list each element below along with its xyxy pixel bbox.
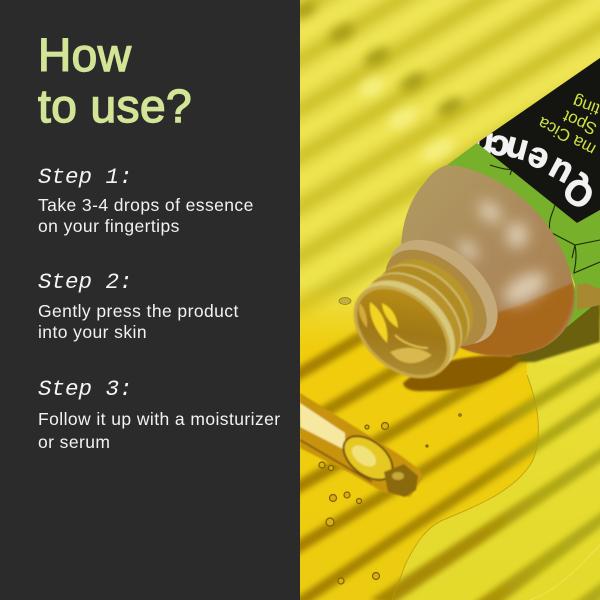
bottle tube green label bbox=[447, 143, 600, 327]
bottle neck threads bbox=[362, 259, 474, 369]
bottle label black panel bbox=[477, 58, 600, 223]
background surface bbox=[300, 0, 600, 600]
bottle shadow bbox=[510, 300, 600, 362]
label crackle lines bbox=[490, 160, 600, 273]
droplet near opening bbox=[339, 298, 351, 304]
step 3 text: Follow it up with a moisturizer bbox=[38, 409, 281, 429]
label ornament bbox=[577, 284, 600, 310]
dropper bulb bbox=[342, 434, 394, 482]
step 1 heading: Step 1: bbox=[38, 164, 133, 190]
title: to use? bbox=[38, 80, 192, 132]
upper dark blobs and highlights bbox=[292, 0, 466, 166]
oil droplets bbox=[319, 414, 461, 584]
product line 2: Spot bbox=[560, 106, 600, 139]
step 3 text bbox=[38, 409, 281, 452]
step 1 text bbox=[38, 195, 254, 236]
amber liquid bbox=[455, 283, 574, 356]
lower sharp shadow stripes bbox=[300, 305, 600, 600]
step 3 text: or serum bbox=[38, 432, 110, 452]
bottle opening bbox=[353, 285, 451, 380]
photo: oil bottle on yellow surface bbox=[300, 0, 600, 600]
oil puddle bbox=[300, 285, 538, 600]
product name: ma Cica bbox=[534, 113, 599, 159]
neck shadow bbox=[403, 356, 522, 391]
step 2 text: into your skin bbox=[38, 322, 147, 342]
step 1 text: Take 3-4 drops of essence bbox=[38, 195, 254, 215]
dropper pipette bbox=[300, 393, 423, 497]
title: How bbox=[38, 29, 131, 81]
opening reflections bbox=[359, 302, 432, 363]
oil puddle outline bbox=[392, 375, 538, 600]
panel: instructions bbox=[0, 0, 300, 600]
title bbox=[38, 29, 192, 132]
step 3 heading: Step 3: bbox=[38, 376, 133, 402]
upper soft shadow stripes bbox=[290, 0, 600, 321]
step 2 text bbox=[38, 301, 239, 342]
bottle collar bbox=[390, 240, 498, 344]
step 2 text: Gently press the product bbox=[38, 301, 239, 321]
label text bbox=[477, 94, 600, 207]
brand name: Quench bbox=[469, 123, 600, 218]
dropper tip bbox=[384, 464, 418, 497]
step 1 text: on your fingertips bbox=[38, 216, 180, 236]
amber bottle shoulder bbox=[401, 165, 575, 356]
step 2 heading: Step 2: bbox=[38, 269, 133, 295]
shoulder highlights bbox=[455, 197, 552, 310]
